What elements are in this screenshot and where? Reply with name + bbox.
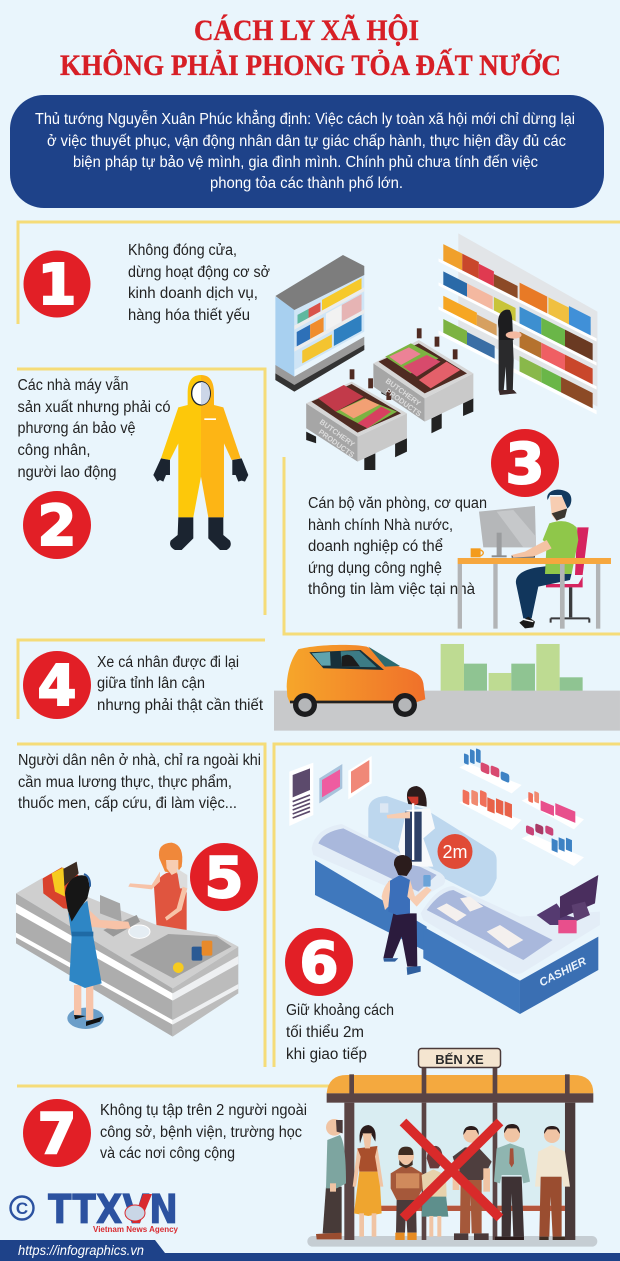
text 1: hàng hóa thiết yếu	[128, 307, 250, 324]
logo: copyright and TTXVN: Vietnam News Agency	[93, 1224, 178, 1234]
illustration: butcher table front	[306, 369, 407, 470]
number badge 5	[190, 843, 258, 911]
illustration: grocery shelves	[439, 233, 597, 414]
panel: 2 factories	[17, 369, 265, 615]
illustration: butcher table back	[373, 328, 473, 433]
text 1	[128, 242, 270, 324]
text 4: nhưng phải thật cần thiết	[97, 697, 264, 714]
label: butchery products signs: BUTCHERY	[384, 376, 423, 408]
title: KHÔNG PHẢI PHONG TỎA ĐẤT NƯỚC	[60, 48, 561, 82]
number badge 4: 4	[38, 654, 76, 719]
text 1: kinh doanh dịch vụ,	[128, 285, 258, 302]
text 2: công nhân,	[18, 442, 90, 459]
text 5: cần mua lương thực, thực phẩm,	[18, 774, 232, 791]
text 6	[286, 1002, 394, 1063]
text 6: Giữ khoảng cách	[286, 1002, 394, 1019]
logo: copyright and TTXVN: TTXVN	[48, 1187, 178, 1233]
intro banner: Thủ tướng Nguyễn Xuân Phúc khẳng định: Việc cách ly toàn xã hội mới chỉ dừng lại	[35, 110, 575, 128]
illustration: man working at a desk	[458, 490, 611, 629]
sign: bus station: BẾN XE	[435, 1052, 484, 1067]
illustration: pharmacy counters	[312, 796, 600, 1014]
text 3: hành chính Nhà nước,	[308, 517, 453, 534]
text 4	[97, 654, 264, 714]
text 2: phương án bảo vệ	[18, 420, 136, 437]
text 4: Xe cá nhân được đi lại	[97, 654, 239, 671]
illustration: customer	[382, 855, 432, 975]
intro banner: ở việc thuyết phục, vận động nhân dân tự giác chấp hành, thực hiện đầy đủ các	[47, 133, 566, 150]
text 1: dừng hoạt động cơ sở	[128, 264, 270, 281]
number badge 7	[23, 1099, 91, 1167]
text 7: và các nơi công cộng	[100, 1145, 235, 1162]
icon: red X forbidding gathering	[403, 1122, 500, 1218]
text 5: Người dân nên ở nhà, chỉ ra ngoài khi	[18, 752, 261, 769]
illustration: protective suit	[153, 375, 248, 550]
title	[60, 14, 561, 82]
panel: 7 no gatherings	[17, 1048, 597, 1247]
number badge 3	[491, 429, 559, 497]
text 2: Các nhà máy vẫn	[18, 377, 128, 394]
text 7	[100, 1102, 307, 1162]
logo: copyright and TTXVN: C	[16, 1199, 28, 1218]
label: butchery products signs: BUTCHERY	[318, 417, 357, 449]
text 3: Cán bộ văn phòng, cơ quan	[308, 495, 487, 512]
illustration: pharmacist	[380, 786, 435, 867]
text 3: thông tin làm việc tại nhà	[308, 581, 475, 598]
title: CÁCH LY XÃ HỘI	[194, 14, 419, 47]
panel: 5 stay at home	[16, 744, 265, 1067]
logo: copyright and TTXVN	[10, 1187, 178, 1234]
text 2: người lao động	[18, 464, 116, 481]
text 5	[18, 752, 261, 812]
intro banner	[10, 95, 604, 208]
badge: 2m distance: 2m	[442, 842, 468, 862]
text 5: thuốc men, cấp cứu, đi làm việc...	[18, 795, 237, 812]
number badge 2: 2	[38, 494, 76, 559]
text 4: giữa tỉnh lân cận	[97, 675, 205, 692]
footer bar with url	[0, 1240, 620, 1261]
number badge 1: 1	[38, 253, 76, 318]
illustration: refrigerated cabinet	[275, 255, 364, 392]
text 3	[308, 495, 487, 598]
illustration: shopper at the shelf	[498, 310, 522, 395]
illustration: waiting people	[316, 1119, 570, 1240]
panel: 6 keep distance	[274, 743, 620, 1067]
number badge 3: 3	[506, 432, 544, 497]
footer bar with url: https://infographics.vn	[18, 1243, 144, 1258]
text 1: Không đóng cửa,	[128, 242, 237, 259]
number badge 5: 5	[205, 846, 243, 911]
text 7: công sở, bệnh viện, trường học	[100, 1124, 302, 1141]
illustration: road and skyline	[274, 644, 620, 731]
panel: 3 work from home	[284, 429, 620, 634]
illustration: bus stop shelter	[307, 1067, 597, 1247]
illustration: supermarket checkout	[16, 843, 238, 1037]
illustration: pharmacy counters: CASHIER	[538, 955, 589, 989]
label: butchery products signs: PRODUCTS	[317, 427, 356, 459]
text 2	[18, 377, 170, 481]
text 6: tối thiểu 2m	[286, 1024, 364, 1041]
illustration: orange car	[287, 645, 425, 717]
text 2: sản xuất nhưng phải có	[18, 399, 170, 416]
number badge 6	[285, 928, 353, 996]
intro banner: phong tỏa các thành phố lớn.	[210, 175, 403, 192]
text 6: khi giao tiếp	[286, 1046, 367, 1063]
text 3: doanh nghiệp có thể	[308, 538, 443, 555]
label: butchery products signs: PRODUCTS	[384, 386, 423, 418]
number badge 6: 6	[300, 931, 338, 996]
text 7: Không tụ tập trên 2 người ngoài	[100, 1102, 307, 1119]
text 3: ứng dụng công nghệ	[308, 560, 442, 577]
panel: 1 keep businesses open	[18, 222, 620, 470]
label: butchery products signs	[317, 376, 423, 459]
badge: 2m distance	[438, 834, 472, 869]
number badge 2	[23, 491, 91, 559]
number badge 4	[23, 651, 91, 719]
panel: 4 personal vehicles	[18, 640, 620, 731]
illustration: wall posters	[289, 756, 372, 826]
number badge 1	[24, 250, 90, 318]
sign: bus station	[418, 1048, 500, 1068]
number badge 7: 7	[38, 1102, 76, 1167]
illustration: pharmacy shelves	[459, 743, 584, 866]
intro banner: biện pháp tự bảo vệ mình, gia đình mình. Chính phủ chưa tính đến việc	[73, 154, 538, 171]
